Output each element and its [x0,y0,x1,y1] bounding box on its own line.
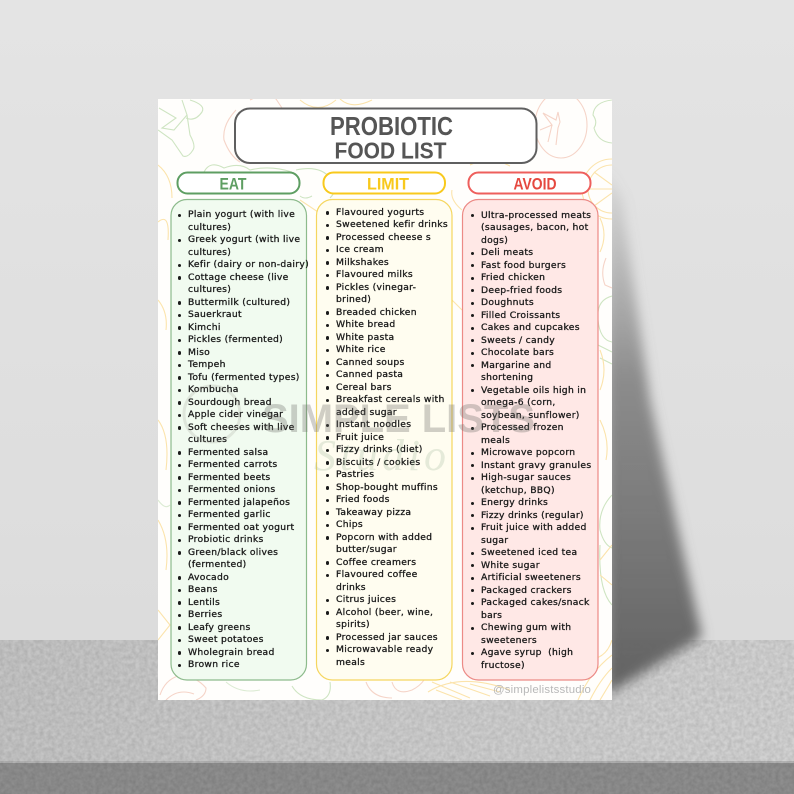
list: eat foods: Sourdough bread [188,397,272,408]
title box [235,108,536,163]
list: limit foods: Flavoured coffee [336,569,418,580]
list: avoid foods: Chewing gum with [481,622,571,633]
list: avoid foods: Fried chicken [481,272,545,283]
panel: eat column [171,172,306,680]
list: avoid foods: dogs) [481,234,508,246]
list: eat foods: Cottage cheese (live [188,272,289,283]
list: limit foods: White pasta [336,332,394,343]
list: limit foods: Shop-bought muffins [336,482,438,493]
list: limit foods: Instant noodles [336,419,411,430]
list: limit foods [326,207,448,668]
list: eat foods: Apple cider vinegar [188,409,283,420]
list: eat foods: Probiotic drinks [188,534,264,545]
list: eat foods: Fermented carrots [188,459,277,470]
icon: tomato outline [160,92,612,700]
list: limit foods: Fruit juice [336,432,384,443]
list: avoid foods: Fruit juice with added [481,522,587,533]
list: avoid foods: Margarine and [481,360,552,370]
list: eat foods: Buttermilk (cultured) [188,297,290,308]
list: limit foods: Fried foods [336,494,390,505]
list: avoid foods: Instant gravy granules [481,460,591,470]
list: eat foods: Kombucha [188,384,239,395]
list: eat foods: Berries [188,609,222,620]
list: eat foods: Green/black olives [188,547,278,558]
list: avoid foods: Deli meats [481,247,533,258]
heading: avoid [468,172,590,194]
list: avoid foods: sweeteners [481,634,537,646]
list: avoid foods: Cakes and cupcakes [481,322,580,333]
list: avoid foods: Filled Croissants [481,310,560,320]
list: avoid foods: Processed frozen [481,422,564,433]
list: avoid foods: Sweets / candy [481,334,555,346]
list: limit foods: Citrus juices [336,594,396,605]
list: limit foods: Flavoured milks [336,269,413,280]
list: limit foods: Breakfast cereals with [336,394,445,405]
list: eat foods: Tempeh [188,359,226,370]
list: limit foods: Canned soups [336,357,405,368]
list: avoid foods: Packaged crackers [481,584,572,596]
list: eat foods: Miso [188,347,210,358]
list: eat foods: Avocado [188,572,229,583]
list: avoid foods: sugar [481,534,508,546]
list: eat foods: cultures) [188,247,231,258]
list: limit foods: Fizzy drinks (diet) [336,444,423,455]
list: eat foods: Plain yogurt (with live [188,209,295,220]
list: avoid foods: Sweetened iced tea [481,547,577,558]
list: eat foods: Kimchi [188,322,221,333]
list: avoid foods: Agave syrup (high [481,647,573,658]
list: avoid foods: Chocolate bars [481,347,554,358]
list: avoid foods: Energy drinks [481,497,548,508]
list: eat foods: Fermented salsa [188,447,268,458]
list: limit foods: drinks [336,582,366,593]
list: avoid foods: meals [481,434,510,446]
list: avoid foods: Fizzy drinks (regular) [481,510,584,520]
list: limit foods: spirits) [336,619,370,630]
list: avoid foods: Doughnuts [481,297,534,308]
list: avoid foods: Fast food burgers [481,260,566,270]
list: limit foods: Flavoured yogurts [336,207,424,218]
list: limit foods: butter/sugar [336,544,397,555]
list: eat foods: Fermented oat yogurt [188,522,294,533]
heading: avoid: AVOID [514,174,556,193]
list: limit foods: Chips [336,519,363,530]
list: eat foods: cultures) [188,284,231,295]
list: eat foods: Beans [188,584,218,595]
list: avoid foods: White sugar [481,560,540,570]
list: limit foods: added sugar [336,407,397,418]
list: limit foods: Milkshakes [336,257,389,268]
list: eat foods: Kefir (dairy or non-dairy) [188,259,309,270]
icon: pepper outline [158,500,260,691]
list: limit foods: Sweetened kefir drinks [336,219,448,230]
list: limit foods: Ice cream [336,244,384,255]
list: eat foods: Brown rice [188,659,240,670]
list: avoid foods: bars [481,610,502,620]
list: eat foods: Fermented beets [188,472,271,483]
list: limit foods: Popcorn with added [336,532,432,543]
list: limit foods: White rice [336,344,386,355]
list: eat foods: Soft cheeses with live [188,422,295,433]
list: eat foods: Pickles (fermented) [188,334,283,345]
list: avoid foods: Artificial sweeteners [481,572,581,583]
list: limit foods: meals [336,657,365,668]
list: limit foods: brined) [336,294,371,305]
list: avoid foods: (sausages, bacon, hot [481,222,588,233]
panel: limit column [316,172,452,680]
list: limit foods: Pickles (vinegar- [336,282,416,293]
heading: eat: EAT [220,174,247,193]
poster shadow [606,170,702,695]
list: eat foods: Fermented garlic [188,509,271,520]
list: eat foods: Sweet potatoes [188,634,264,645]
list: eat foods: Fermented jalapeños [188,497,290,508]
list: limit foods: Processed cheese s [336,232,431,243]
list: avoid foods: fructose) [481,660,525,670]
list: avoid foods: Packaged cakes/snack [481,597,590,608]
list: eat foods: Sauerkraut [188,309,242,320]
title: food list: FOOD LIST [334,137,446,163]
watermark: simple lists studio: Studio [314,431,446,480]
list: limit foods: Microwavable ready [336,644,433,655]
list: avoid foods: shortening [481,372,533,383]
heading: limit: LIMIT [367,174,410,193]
list: avoid foods: Ultra-processed meats [481,210,591,220]
list: avoid foods: Microwave popcorn [481,447,575,458]
list: limit foods: Canned pasta [336,369,403,380]
list: limit foods: Biscuits / cookies [336,457,420,468]
list: limit foods: Cereal bars [336,382,392,393]
list: avoid foods: Vegetable oils high in [481,384,586,396]
heading: eat [178,172,300,194]
list: limit foods: Processed jar sauces [336,632,438,643]
list: limit foods: Coffee creamers [336,557,416,568]
list: eat foods: Leafy greens [188,622,251,633]
list: avoid foods: High-sugar sauces [481,472,571,483]
list: eat foods: Tofu (fermented types) [188,372,300,383]
icon: broccoli outline [158,100,612,700]
list: eat foods: cultures) [188,222,231,233]
list: avoid foods [471,210,591,670]
list: limit foods: Breaded chicken [336,307,417,318]
list: eat foods: Lentils [188,597,220,608]
list: eat foods: Wholegrain bread [188,647,275,658]
list: avoid foods: omega-6 (corn, [481,397,556,408]
watermark: simple lists studio: SIMPLE LISTS [262,397,535,441]
list: avoid foods: (ketchup, BBQ) [481,484,555,496]
list: eat foods [178,209,309,670]
title: probiotic: PROBIOTIC [330,113,453,141]
list: avoid foods: soybean, sunflower) [481,410,580,420]
list: limit foods: Alcohol (beer, wine, [336,607,433,618]
panel: avoid column [462,172,598,680]
list: eat foods: Fermented onions [188,484,276,495]
icon: citrus outline [158,99,642,700]
poster sheet with pale food outlines [158,92,642,700]
heading: limit [324,172,445,194]
list: eat foods: cultures [188,434,227,445]
list: eat foods: (fermented) [188,559,246,570]
list: limit foods: White bread [336,319,395,330]
list: eat foods: Greek yogurt (with live [188,234,300,245]
list: limit foods: Pastries [336,469,374,480]
list: limit foods: Takeaway pizza [336,507,411,518]
list: avoid foods: Deep-fried foods [481,284,562,296]
handle: simple lists studio: @simplelistsstudio [493,684,591,696]
